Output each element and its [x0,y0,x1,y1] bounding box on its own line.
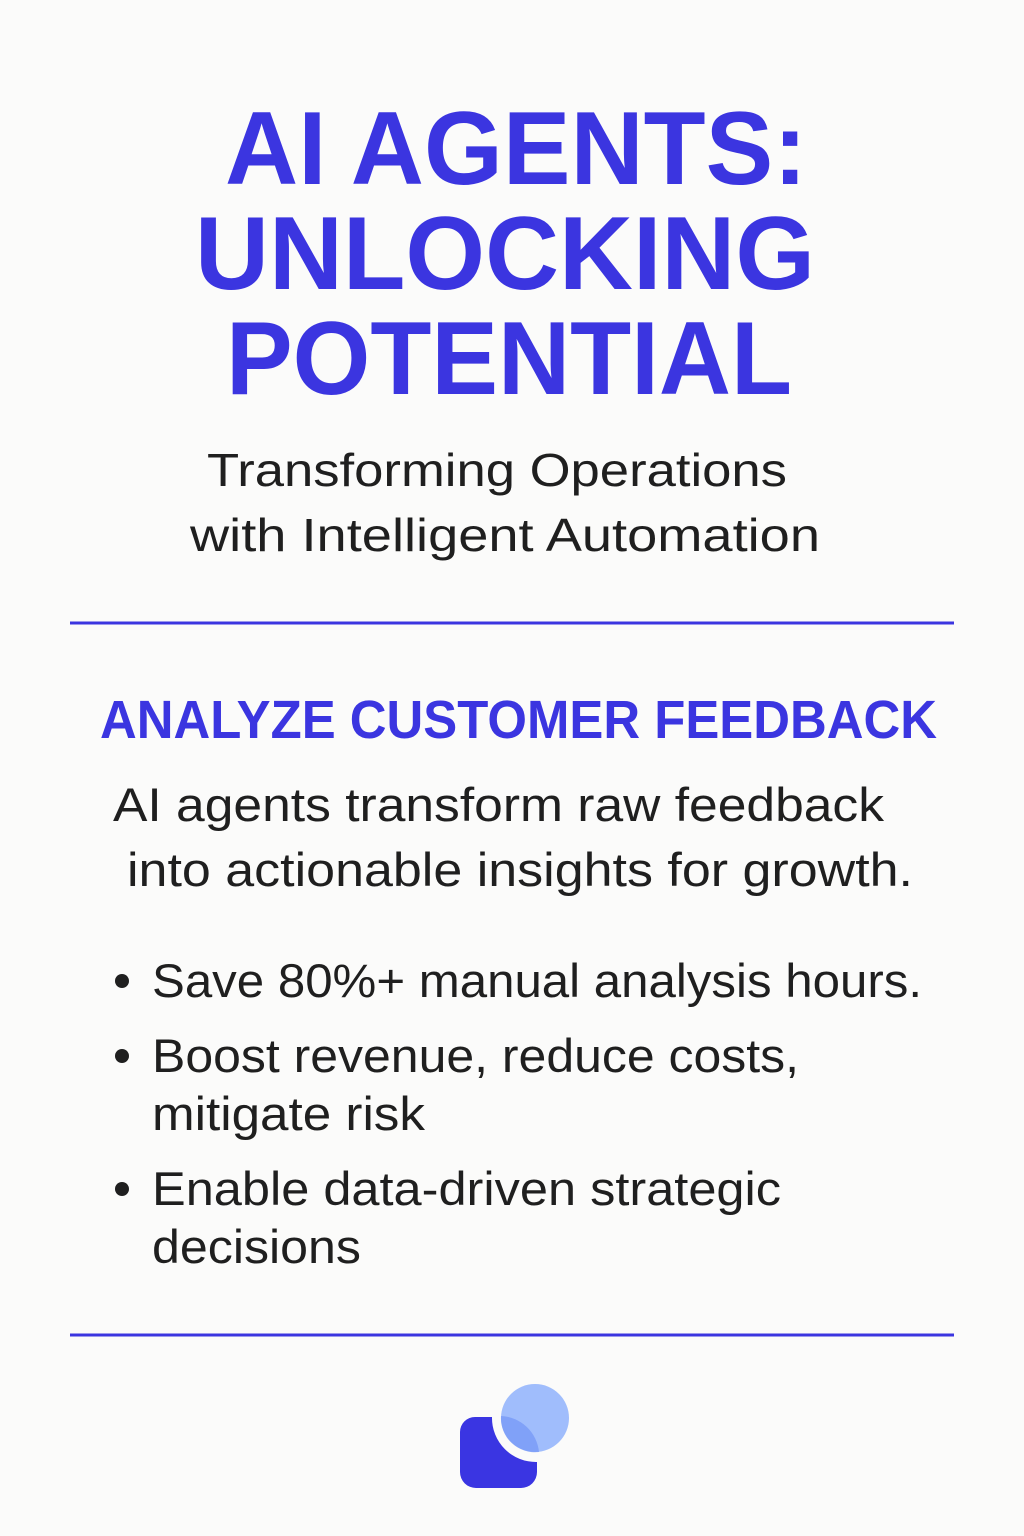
title [195,91,815,417]
body text: into actionable insights for growth. [127,843,913,896]
title: POTENTIAL [226,301,792,417]
section heading: ANALYZE CUSTOMER FEEDBACK [100,690,937,750]
title: UNLOCKING [195,196,815,312]
title: AI AGENTS: [225,91,807,207]
subtitle: with Intelligent Automation [189,509,820,561]
logo [460,1384,569,1488]
bullet 1: Save 80%+ manual analysis hours. [152,954,922,1007]
body text: AI agents transform raw feedback [113,778,885,831]
bullet 2: Boost revenue, reduce costs, [152,1029,799,1082]
bullet 2 [115,1029,799,1140]
bullet 3: decisions [152,1220,361,1273]
bullet 3 [115,1162,781,1273]
subtitle [189,444,820,561]
body text [113,778,913,896]
bullet list [115,954,922,1273]
subtitle: Transforming Operations [207,444,787,496]
bullet 2: mitigate risk [152,1087,426,1140]
bullet 3: Enable data-driven strategic [152,1162,781,1215]
